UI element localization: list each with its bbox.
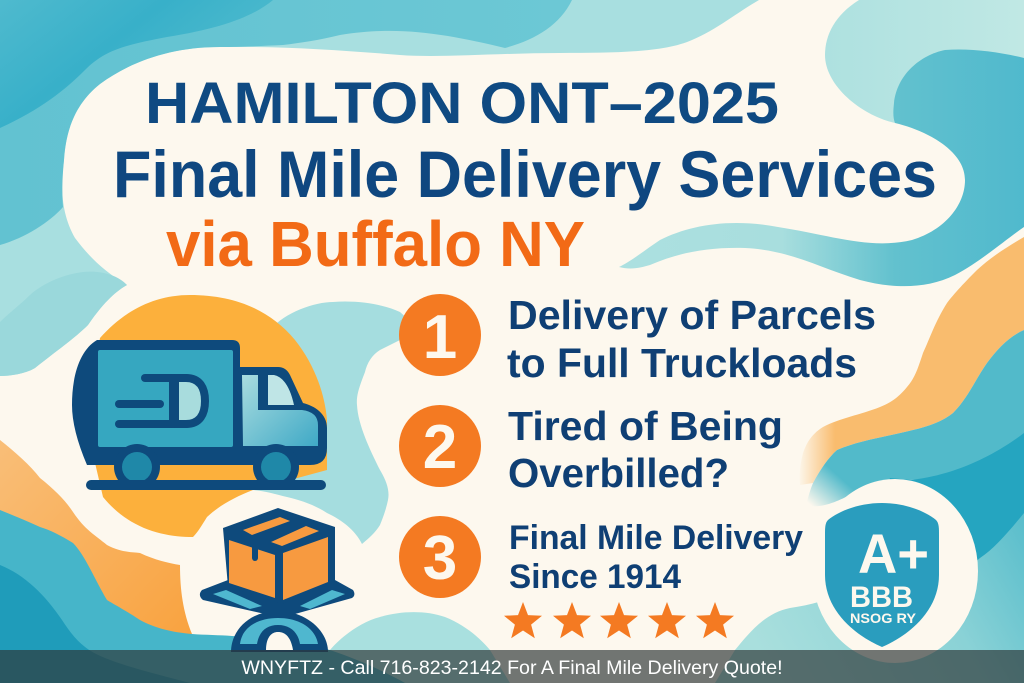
badge grade A+: A+ (858, 522, 929, 585)
item text 1: Delivery of Parcels (508, 292, 876, 338)
number badge 3: 3 (423, 524, 457, 593)
wheel: front (253, 444, 299, 490)
scale tray wings (200, 580, 354, 616)
list item 3 (399, 516, 803, 598)
footer bar with call to action (0, 650, 1024, 683)
truck body (72, 340, 327, 465)
item text 3: Final Mile Delivery (509, 519, 803, 557)
number badge 1: 1 (423, 303, 457, 372)
badge small label: NSOG RY (850, 610, 917, 626)
item text 3: Since 1914 (509, 558, 681, 596)
cab window (268, 375, 294, 405)
title line: Final Mile Delivery Services: Final Mile Delivery Services (113, 137, 937, 211)
five star rating (504, 602, 734, 638)
item text 2: Overbilled? (508, 450, 729, 496)
item text 3 (509, 519, 803, 596)
cargo box panel (98, 350, 233, 447)
list item 1 (399, 292, 876, 386)
road line (91, 480, 321, 490)
orange sun circle (85, 295, 327, 537)
item text 2: Tired of Being (508, 403, 783, 449)
title: three-line heading (113, 71, 937, 280)
title line: via Buffalo NY: via Buffalo NY (166, 208, 585, 280)
wheel: rear (114, 444, 160, 490)
number badge 2 (399, 405, 481, 487)
BBB A+ rating badge (812, 479, 978, 663)
number badge 1 (399, 294, 481, 376)
cardboard box (223, 508, 335, 604)
badge cream halo (812, 479, 978, 663)
badge shield (825, 503, 939, 647)
item text 1 (507, 292, 876, 386)
number badge 3 (399, 516, 481, 598)
illustration: parcel on scale (200, 508, 354, 652)
speed logo on cargo box (119, 378, 205, 424)
cab panel (242, 375, 318, 446)
badge BBB label: BBB (850, 581, 913, 614)
scale base arch (231, 611, 328, 652)
item text 2 (508, 403, 783, 496)
list item 2 (399, 403, 783, 496)
footer bar with call to action: WNYFTZ - Call 716-823-2142 For A Final Mile Delivery Quote! (241, 657, 783, 679)
illustration: delivery truck on orange sun (72, 295, 327, 537)
title line: Hamilton Ont 2025: HAMILTON ONT–2025 (145, 71, 779, 136)
item text 1: to Full Truckloads (507, 340, 857, 386)
number badge 2: 2 (423, 413, 457, 482)
